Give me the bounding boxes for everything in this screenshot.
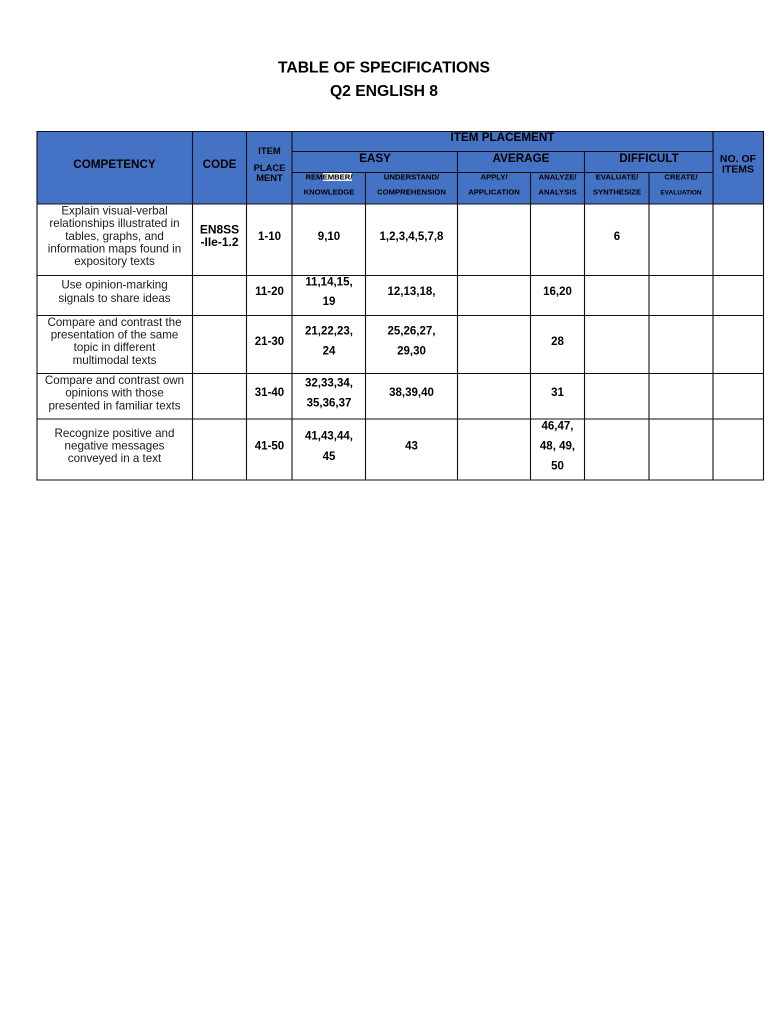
values: 1-10 — [258, 231, 281, 243]
header: item placement: ITEM PLACEMENT — [451, 131, 555, 144]
code: -IIe-1.2 — [200, 235, 239, 249]
header: number of items: NO. OF — [720, 153, 757, 165]
header: competency: COMPETENCY — [73, 158, 156, 171]
values: 50 — [551, 460, 564, 472]
values: 1,2,3,4,5,7,8 — [380, 231, 444, 243]
header: number of items: ITEMS — [722, 164, 754, 176]
values — [255, 378, 564, 410]
values — [255, 326, 564, 358]
subheader: evaluate: SYNTHESIZE — [593, 188, 641, 196]
subheader: analyze: ANALYSIS — [538, 188, 577, 196]
subheader: remember — [304, 172, 354, 196]
competency text: relationships illustrated in — [49, 217, 180, 230]
subheader: evaluate — [593, 172, 641, 196]
header: item placement column: PLACE — [254, 162, 285, 173]
values — [255, 420, 575, 472]
highlighted text background — [323, 173, 352, 181]
competency text — [47, 316, 182, 367]
values: 29,30 — [397, 346, 426, 358]
values: 41,43,44, — [305, 430, 353, 442]
code — [200, 222, 239, 249]
title: Q2 ENGLISH 8 — [330, 83, 438, 100]
competency text — [48, 204, 181, 268]
values: 32,33,34, — [305, 378, 353, 390]
subheader: apply: APPLY/ — [480, 172, 508, 182]
competency text: topic in different — [74, 341, 156, 354]
values: 21,22,23, — [305, 326, 353, 338]
subheader: apply: APPLICATION — [468, 188, 520, 196]
competency text: Explain visual-verbal — [61, 204, 168, 218]
values: 38,39,40 — [389, 387, 434, 399]
code: EN8SS — [200, 222, 239, 236]
competency text — [55, 427, 174, 465]
values — [255, 276, 572, 308]
table — [37, 131, 764, 480]
competency text — [58, 278, 171, 305]
competency text: presentation of the same — [51, 328, 178, 342]
subheader: apply — [468, 172, 520, 196]
competency text: expository texts — [74, 255, 155, 268]
values: 45 — [323, 451, 336, 463]
grid lines — [37, 132, 764, 480]
subheader: create — [660, 172, 702, 196]
row 5 — [55, 420, 575, 472]
values: 31-40 — [255, 387, 284, 399]
values: 41-50 — [255, 440, 284, 452]
values: 31 — [551, 387, 564, 399]
values: 16,20 — [543, 286, 572, 298]
header: number of items — [720, 153, 757, 176]
values — [258, 231, 620, 243]
competency text: presented in familiar texts — [48, 400, 181, 412]
subheader: analyze: ANALYZE/ — [539, 172, 577, 182]
header: average: AVERAGE — [493, 152, 550, 165]
values: 24 — [323, 346, 336, 358]
subheader: evaluate: EVALUATE/ — [596, 172, 639, 182]
subheader: create: CREATE/ — [664, 172, 698, 182]
values: 46,47, — [542, 420, 573, 432]
competency text: Use opinion-marking — [61, 278, 168, 292]
header background — [37, 132, 764, 204]
values: 9,10 — [318, 231, 340, 243]
values: 25,26,27, — [388, 326, 435, 338]
subheader: create: EVALUATION — [660, 190, 702, 196]
values: 19 — [323, 296, 335, 308]
header: difficult: DIFFICULT — [619, 152, 680, 165]
header: code: CODE — [203, 158, 237, 171]
row 1 — [48, 204, 620, 268]
competency text: opinions with those — [65, 386, 164, 400]
competency text: multimodal texts — [73, 354, 157, 367]
header: easy: EASY — [359, 152, 391, 165]
values: 35,36,37 — [307, 398, 351, 410]
competency text: conveyed in a text — [68, 452, 162, 465]
row 2 — [58, 276, 572, 308]
competency text: negative messages — [65, 440, 165, 452]
title — [278, 60, 490, 100]
subheader: understand: UNDERSTAND/ — [384, 172, 440, 182]
competency text: signals to share ideas — [58, 292, 171, 305]
subheader: analyze — [538, 172, 577, 196]
values: 21-30 — [255, 336, 284, 348]
header: item placement column: ITEM — [258, 145, 281, 156]
values: 11-20 — [255, 286, 284, 298]
competency text: tables, graphs, and — [65, 230, 164, 243]
row 3 — [47, 316, 564, 367]
competency text: information maps found in — [48, 242, 181, 256]
competency text: Recognize positive and — [55, 427, 174, 440]
values: 43 — [405, 440, 418, 452]
values: 48, 49, — [540, 440, 575, 452]
header: item placement column: MENT — [256, 172, 283, 183]
subheader: remember: REMEMBER/ — [306, 172, 353, 182]
header: item placement column — [254, 145, 285, 183]
title: TABLE OF SPECIFICATIONS — [278, 60, 490, 76]
values: 12,13,18, — [388, 286, 435, 298]
competency text: Compare and contrast the — [47, 316, 182, 329]
competency text — [45, 374, 184, 412]
values: 28 — [551, 336, 564, 348]
values: 11,14,15, — [305, 276, 353, 288]
row 4 — [45, 374, 564, 412]
subheader: understand — [377, 172, 446, 196]
subheader: understand: COMPREHENSION — [377, 188, 446, 196]
values: 6 — [614, 231, 620, 243]
competency text: Compare and contrast own — [45, 374, 184, 387]
subheader: remember: KNOWLEDGE — [304, 188, 354, 196]
